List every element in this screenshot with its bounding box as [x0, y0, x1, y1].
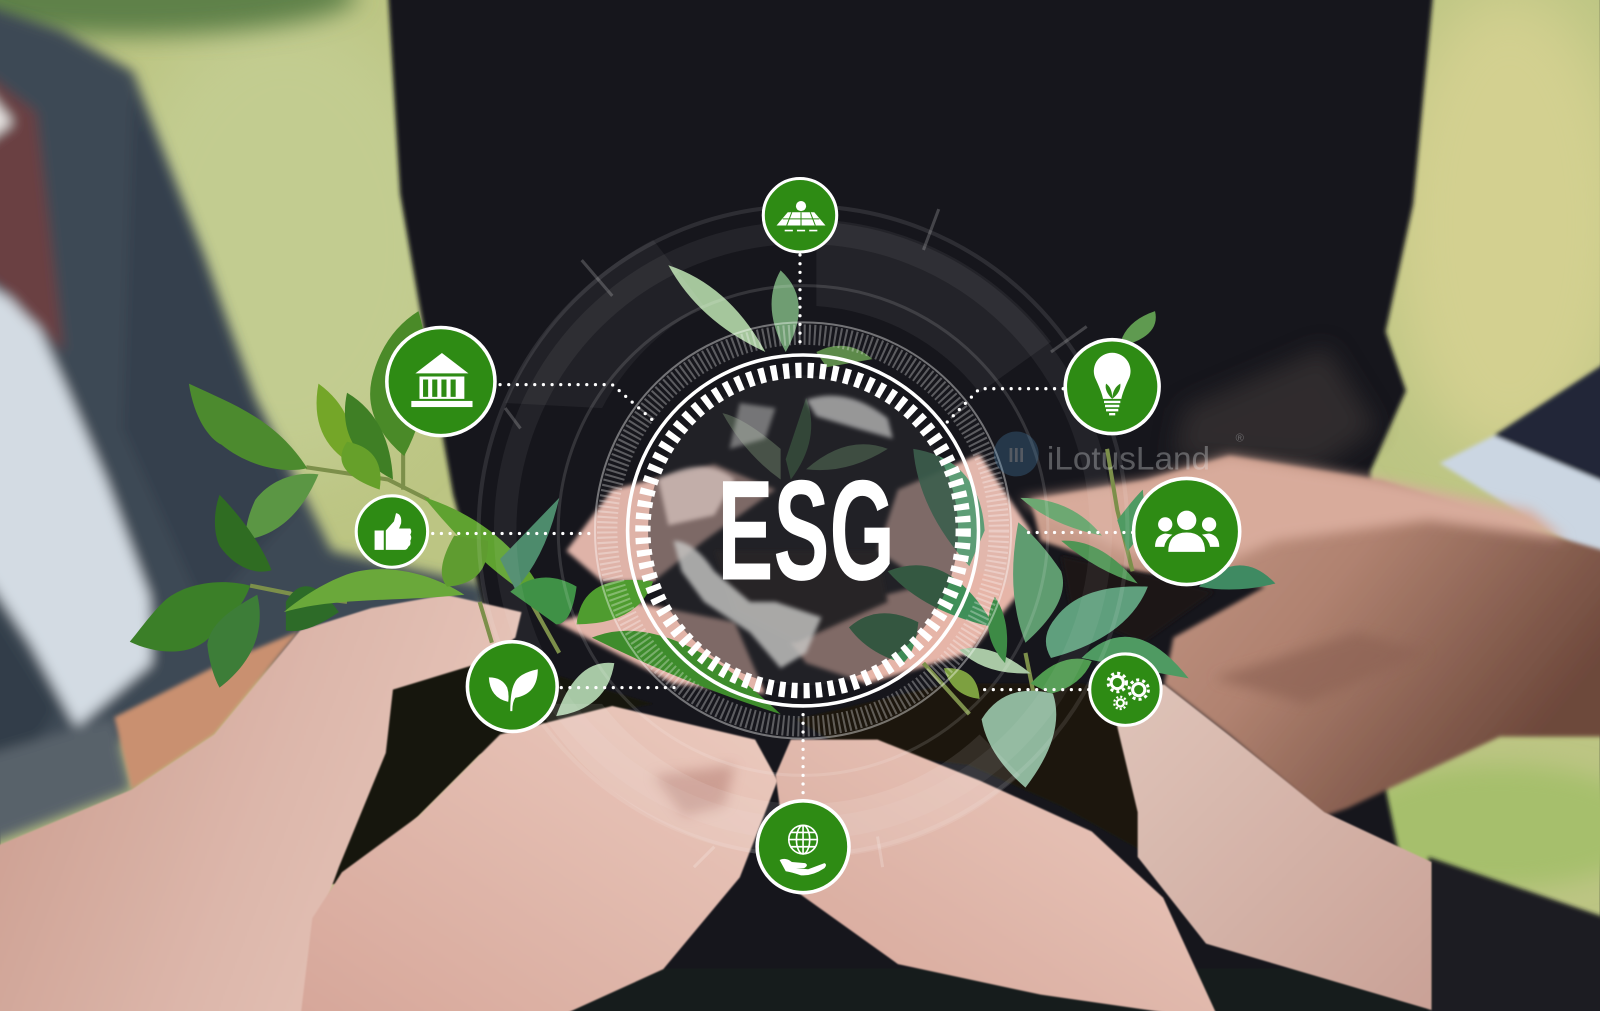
centre right hand	[776, 740, 1219, 1011]
left rear forearm	[114, 630, 300, 790]
central fingers behind globe	[556, 454, 1031, 694]
seedlings	[130, 265, 1275, 788]
centre-right leaves	[913, 449, 985, 566]
HUD rings	[479, 206, 1127, 867]
icon: solar panel	[763, 179, 837, 252]
watermark: iLotusLand: ®	[1236, 433, 1245, 445]
upper-right cluster leaves	[1119, 311, 1156, 347]
dashed ring	[643, 370, 963, 691]
icon: bulb	[1065, 340, 1159, 434]
lower right front hand	[1114, 685, 1431, 1010]
stems	[250, 449, 1133, 714]
icon: globe in hand	[757, 801, 849, 893]
main white ring	[628, 355, 979, 706]
centre left hand	[300, 706, 778, 1011]
outer dial	[479, 206, 1127, 855]
title: ESG: ESG	[717, 451, 895, 610]
top-centre leaves	[668, 265, 765, 352]
watermark: iLotusLand: iLotusLand	[1047, 439, 1210, 476]
hatch ring	[607, 335, 999, 726]
soil	[329, 551, 1214, 888]
icon: people	[1134, 478, 1240, 585]
connector lines	[433, 255, 1133, 801]
icon: thumbs up	[356, 496, 428, 567]
left cluster leaves	[370, 311, 427, 456]
left front hand	[0, 595, 521, 1011]
central suit	[388, 0, 1434, 1011]
watermark: iLotusLand	[994, 432, 1245, 476]
left person	[0, 0, 490, 852]
icon: gears	[1090, 654, 1161, 725]
right upper hand	[1031, 456, 1600, 816]
icon: leaf	[467, 642, 557, 731]
hands and soil	[0, 454, 1600, 1011]
globe	[648, 375, 958, 686]
icon: globe continents	[658, 396, 893, 668]
icon: bank	[387, 327, 495, 436]
right sleeves	[1428, 352, 1600, 1011]
watermark: iLotusLand: lll	[1008, 445, 1024, 467]
